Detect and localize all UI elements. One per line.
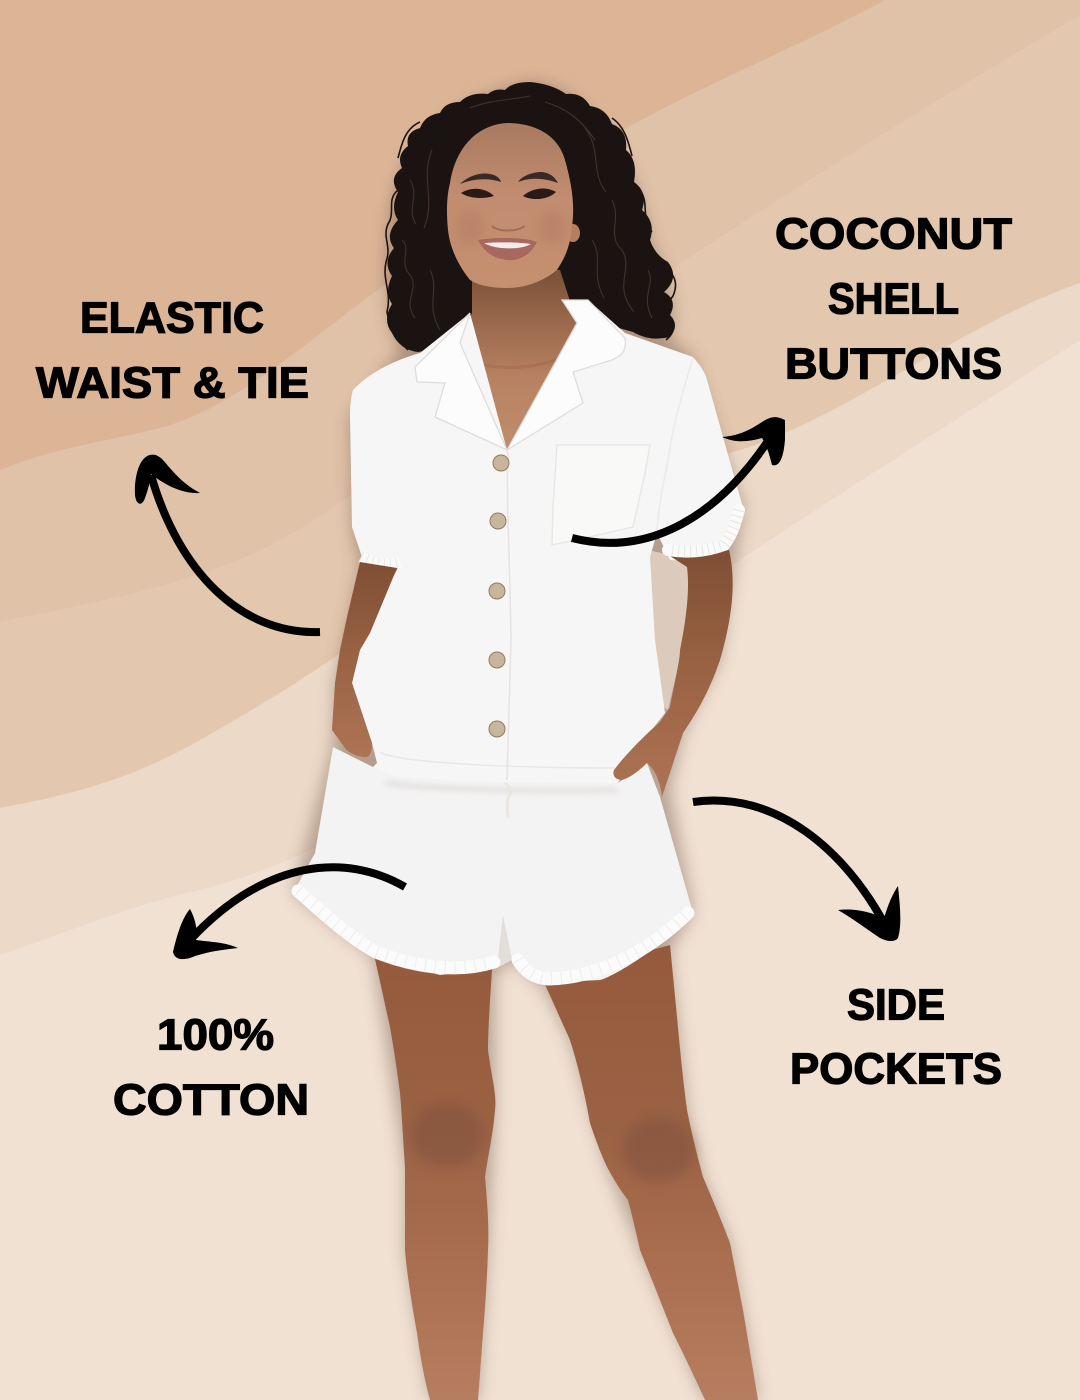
arrow: to elastic waist bbox=[135, 455, 320, 632]
callout: side pockets: SIDE bbox=[847, 980, 945, 1030]
sleeve seam bbox=[657, 358, 693, 533]
knee shading bbox=[622, 1118, 694, 1182]
callout: coconut shell buttons: SHELL bbox=[828, 274, 959, 324]
hair curls bbox=[385, 118, 676, 350]
eyebrows bbox=[460, 172, 558, 184]
left arm and hand bbox=[332, 562, 397, 757]
model photo illustration bbox=[293, 82, 758, 1400]
callout: 100% cotton: 100% bbox=[157, 1010, 274, 1060]
shadow below shirt hem bbox=[385, 783, 618, 791]
callout: elastic waist and tie: WAIST & TIE bbox=[36, 358, 309, 408]
hem bbox=[380, 752, 615, 768]
gap between arm and body bbox=[648, 550, 692, 710]
callout: 100% cotton: COTTON bbox=[113, 1076, 309, 1124]
drawstring bbox=[505, 783, 512, 818]
shirt bbox=[350, 300, 743, 783]
nose bbox=[492, 226, 525, 230]
knee shading bbox=[411, 1103, 483, 1167]
callout: elastic waist and tie: ELASTIC bbox=[80, 294, 264, 342]
callout: 100% cotton bbox=[113, 1010, 309, 1124]
face bbox=[447, 123, 580, 288]
collarbone shadow bbox=[463, 355, 565, 367]
hair highlights bbox=[402, 96, 652, 330]
right leg bbox=[543, 945, 758, 1400]
placket bbox=[507, 452, 511, 780]
collar left bbox=[415, 313, 507, 450]
callout: coconut shell buttons: COCONUT bbox=[775, 210, 1012, 258]
arrow: to cotton fabric bbox=[173, 867, 405, 959]
callout: side pockets: POCKETS bbox=[790, 1044, 1002, 1094]
coconut buttons bbox=[489, 455, 509, 737]
inner leg gap bbox=[497, 915, 512, 968]
callout: elastic waist and tie bbox=[36, 294, 309, 408]
shorts bbox=[293, 747, 693, 983]
arrow: to side pockets bbox=[693, 800, 900, 941]
left leg bbox=[373, 950, 495, 1400]
callout: coconut shell buttons bbox=[775, 210, 1012, 388]
chest pocket bbox=[552, 445, 650, 545]
sleeve cuffs bbox=[361, 557, 400, 564]
shorts frill hems bbox=[298, 891, 494, 968]
right sleeve cuff bbox=[668, 510, 739, 552]
callout: side pockets bbox=[790, 980, 1002, 1094]
right arm and hand bbox=[613, 550, 733, 797]
smile bbox=[478, 238, 537, 260]
eyes bbox=[461, 189, 556, 199]
back of hair bbox=[387, 82, 675, 352]
callout: coconut shell buttons: BUTTONS bbox=[785, 340, 1002, 388]
arrow: to coconut buttons bbox=[572, 417, 785, 543]
collar right bbox=[507, 300, 625, 450]
neck and chest bbox=[455, 270, 578, 452]
cheek blush bbox=[456, 211, 484, 245]
soft figure shadow bbox=[293, 82, 758, 1400]
